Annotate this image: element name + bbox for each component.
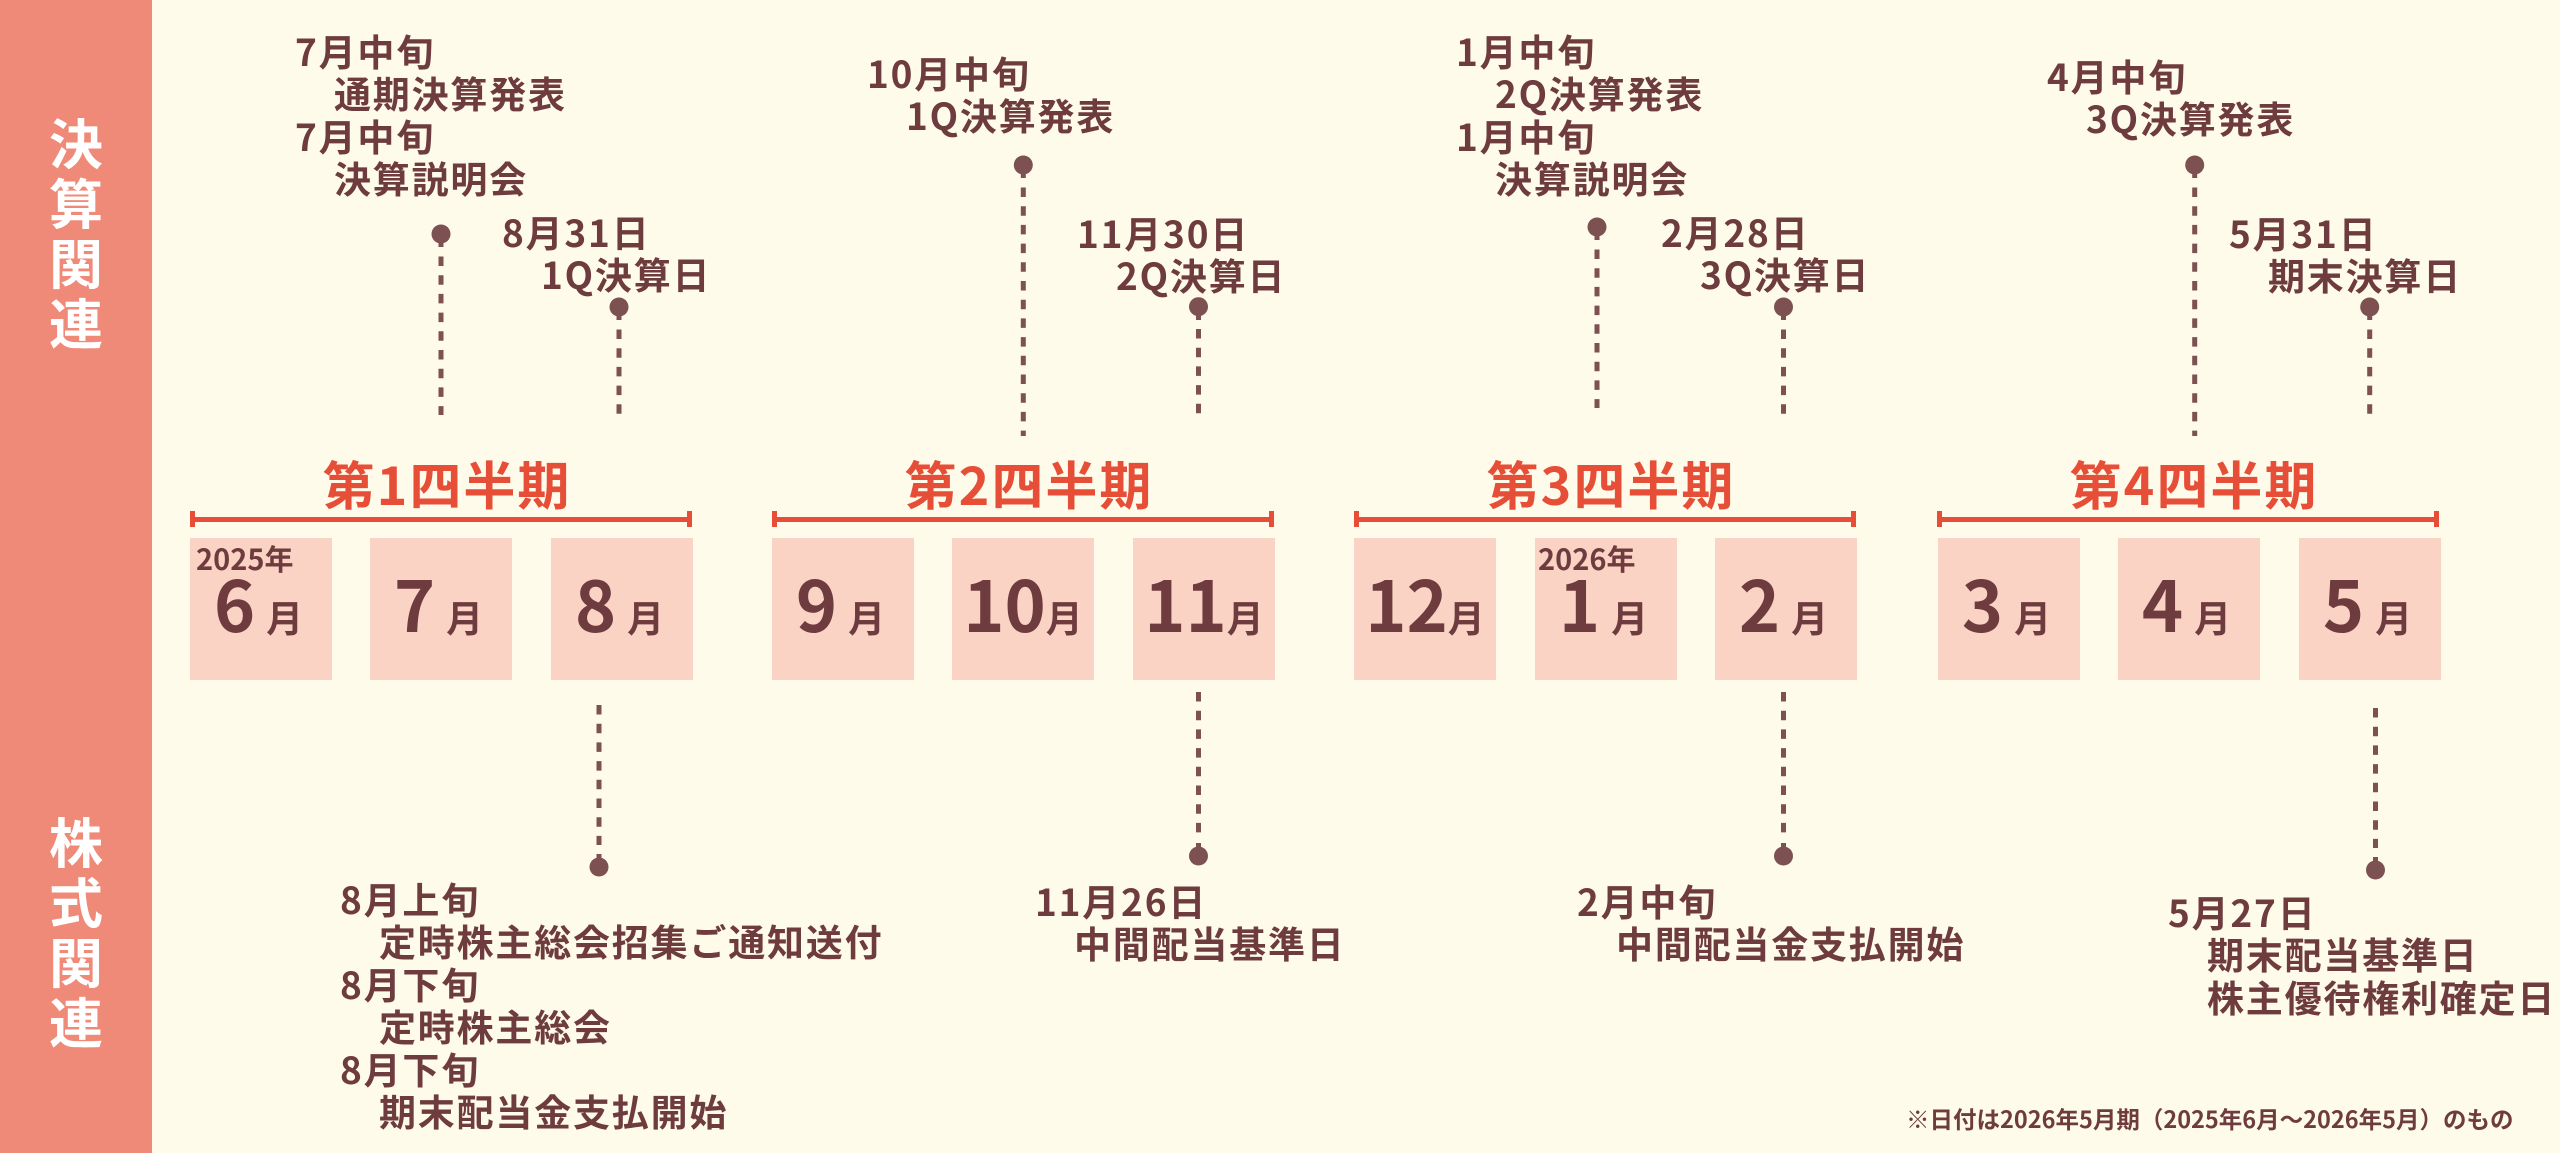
event text: 5月27日 [2168, 884, 2556, 1022]
month: 9月 [772, 538, 914, 680]
month: 6月: 2025年 [196, 537, 293, 579]
event text: 7月中旬 決算発表: 通期決算発表 [334, 65, 567, 119]
quarter bracket 1 [190, 511, 692, 527]
event text: 7月中旬 決算発表 [295, 22, 567, 204]
sidebar label: 株式関連: 式 [49, 860, 103, 939]
quarter bracket 2 [772, 511, 1274, 527]
event text: 2月中旬 [1577, 872, 1965, 969]
connector: 4月中旬 [2185, 156, 2204, 436]
connector: 2月28日 [1774, 298, 1793, 414]
event text: 5月31日: 期末決算日 [2268, 247, 2462, 301]
sidebar label: 決算関連: 関 [49, 221, 103, 300]
connector: 7月中旬 [432, 224, 450, 415]
month: 1月: 1 月 [1559, 552, 1648, 653]
event text: 8月31日: 1Q決算日 [541, 246, 711, 300]
event text: 1月中旬: 1月中旬 [1456, 22, 1596, 76]
event text: 8月31日: 8月31日 [502, 204, 650, 258]
event text: 1月中旬: 1月中旬 [1456, 108, 1596, 162]
quarter heading: 第4四半期: 第4四半期 [2070, 445, 2318, 520]
month: 4月 [2118, 538, 2260, 680]
month: 8月 [551, 538, 693, 680]
connector: 10月中旬 [1014, 156, 1033, 436]
month: 1月: 2026年 [1538, 537, 1635, 579]
event text: 5月27日: 株主優待権利確定日 [2207, 968, 2556, 1022]
event text: 8月31日 [502, 204, 711, 300]
sidebar label: 決算関連 [49, 101, 103, 360]
connector: 5月31日 [2360, 298, 2379, 414]
month: 10月 [952, 538, 1094, 680]
event text: 8月 株式関連: 8月下旬 [340, 1040, 480, 1094]
sidebar label: 株式関連: 関 [49, 920, 103, 999]
sidebar [0, 0, 152, 1153]
month: 6月 [190, 538, 332, 680]
event text: 8月 株式関連: 定時株主総会 [379, 998, 612, 1052]
event text: 2月中旬: 中間配当金支払開始 [1616, 915, 1965, 969]
event text: 8月 株式関連: 期末配当金支払開始 [379, 1083, 728, 1137]
month: 4月: 4 月 [2142, 552, 2231, 653]
connector: 2月中旬 [1774, 692, 1793, 866]
event text: 11月30日: 11月30日 [1077, 204, 1249, 258]
quarter bracket 4 [1937, 511, 2439, 527]
event text: 2月中旬: 2月中旬 [1577, 872, 1717, 926]
month: 3月: 3 月 [1962, 552, 2051, 653]
month: 2月 [1715, 538, 1857, 680]
month: 7月 [370, 538, 512, 680]
event text: 8月 株式関連 [340, 870, 883, 1137]
event text: 5月31日 [2229, 204, 2462, 301]
month: 10月: 10月 [963, 552, 1083, 653]
connector: 1月中旬 [1588, 218, 1606, 408]
event text: 2月28日 [1661, 204, 1870, 300]
month: 1月 [1535, 538, 1677, 680]
event text: 1月中旬: 決算説明会 [1495, 150, 1689, 204]
event text: 4月中旬: 4月中旬 [2047, 48, 2187, 102]
event text: 4月中旬 [2047, 48, 2295, 144]
quarter bracket 3 [1354, 511, 1856, 527]
month: 5月: 5 月 [2323, 552, 2412, 653]
event text: 4月中旬: 3Q決算発表 [2086, 90, 2295, 144]
event text: 5月27日: 5月27日 [2168, 884, 2316, 938]
event text: 5月27日: 期末配当基準日 [2207, 926, 2479, 980]
sidebar label: 株式関連: 連 [49, 980, 103, 1059]
connector: 11月26日 [1189, 692, 1208, 866]
month: 11月: 11月 [1144, 552, 1264, 653]
event text: 7月中旬 決算発表: 7月中旬 [295, 108, 435, 162]
connector: 11月30日 [1189, 297, 1208, 414]
event text: 8月 株式関連: 8月上旬 [340, 870, 480, 924]
event text: 10月中旬: 10月中旬 [867, 44, 1031, 98]
event text: 11月30日: 2Q決算日 [1116, 247, 1286, 301]
event text: 7月中旬 決算発表: 7月中旬 [295, 22, 435, 76]
event text: 11月26日: 11月26日 [1035, 872, 1207, 926]
event text: 11月26日: 中間配当基準日 [1074, 915, 1346, 969]
sidebar label: 株式関連: 株 [49, 800, 103, 879]
month: 12月 [1354, 538, 1496, 680]
event text: 5月31日: 5月31日 [2229, 204, 2378, 258]
month: 12月: 12月 [1365, 552, 1485, 653]
month: 3月 [1938, 538, 2080, 680]
month: 2月: 2 月 [1739, 552, 1828, 653]
event text: 10月中旬: 1Q決算発表 [906, 87, 1115, 141]
month: 6月: 6 月 [214, 552, 303, 653]
event text: 11月26日 [1035, 872, 1346, 969]
event text: 10月中旬 [867, 44, 1115, 141]
quarter heading: 第2四半期: 第2四半期 [905, 445, 1153, 520]
month: 11月 [1133, 538, 1275, 680]
event text: 7月中旬 決算発表: 決算説明会 [334, 150, 528, 204]
sidebar label: 株式関連 [49, 800, 103, 1059]
quarter heading: 第3四半期: 第3四半期 [1487, 445, 1735, 520]
event text: 8月 株式関連: 8月下旬 [340, 956, 480, 1010]
month: 8月: 8 月 [575, 552, 664, 653]
event text: 2月28日: 2月28日 [1661, 204, 1810, 258]
event text: 1月中旬: 2Q決算発表 [1495, 65, 1704, 119]
event text: 2月28日: 3Q決算日 [1700, 246, 1870, 300]
connector: 8月31日 [610, 298, 628, 414]
month: 9月: 9 月 [796, 552, 885, 653]
sidebar label: 決算関連: 算 [49, 161, 103, 240]
footnote: ※日付は2026年5月期（2025年6月～2026年5月）のもの [1906, 1101, 2513, 1135]
quarter heading: 第1四半期: 第1四半期 [323, 445, 571, 520]
month: 5月 [2299, 538, 2441, 680]
event text: 11月30日 [1077, 204, 1286, 301]
sidebar label: 決算関連: 連 [49, 281, 103, 360]
connector: 5月27日 [2366, 708, 2385, 880]
sidebar label: 決算関連: 決 [49, 101, 103, 180]
event text: 8月 株式関連: 定時株主総会招集ご通知送付 [379, 913, 883, 967]
event text: 1月中旬 [1456, 22, 1704, 204]
connector: 8月株式 [590, 705, 608, 876]
month: 7月: 7 月 [394, 552, 483, 653]
